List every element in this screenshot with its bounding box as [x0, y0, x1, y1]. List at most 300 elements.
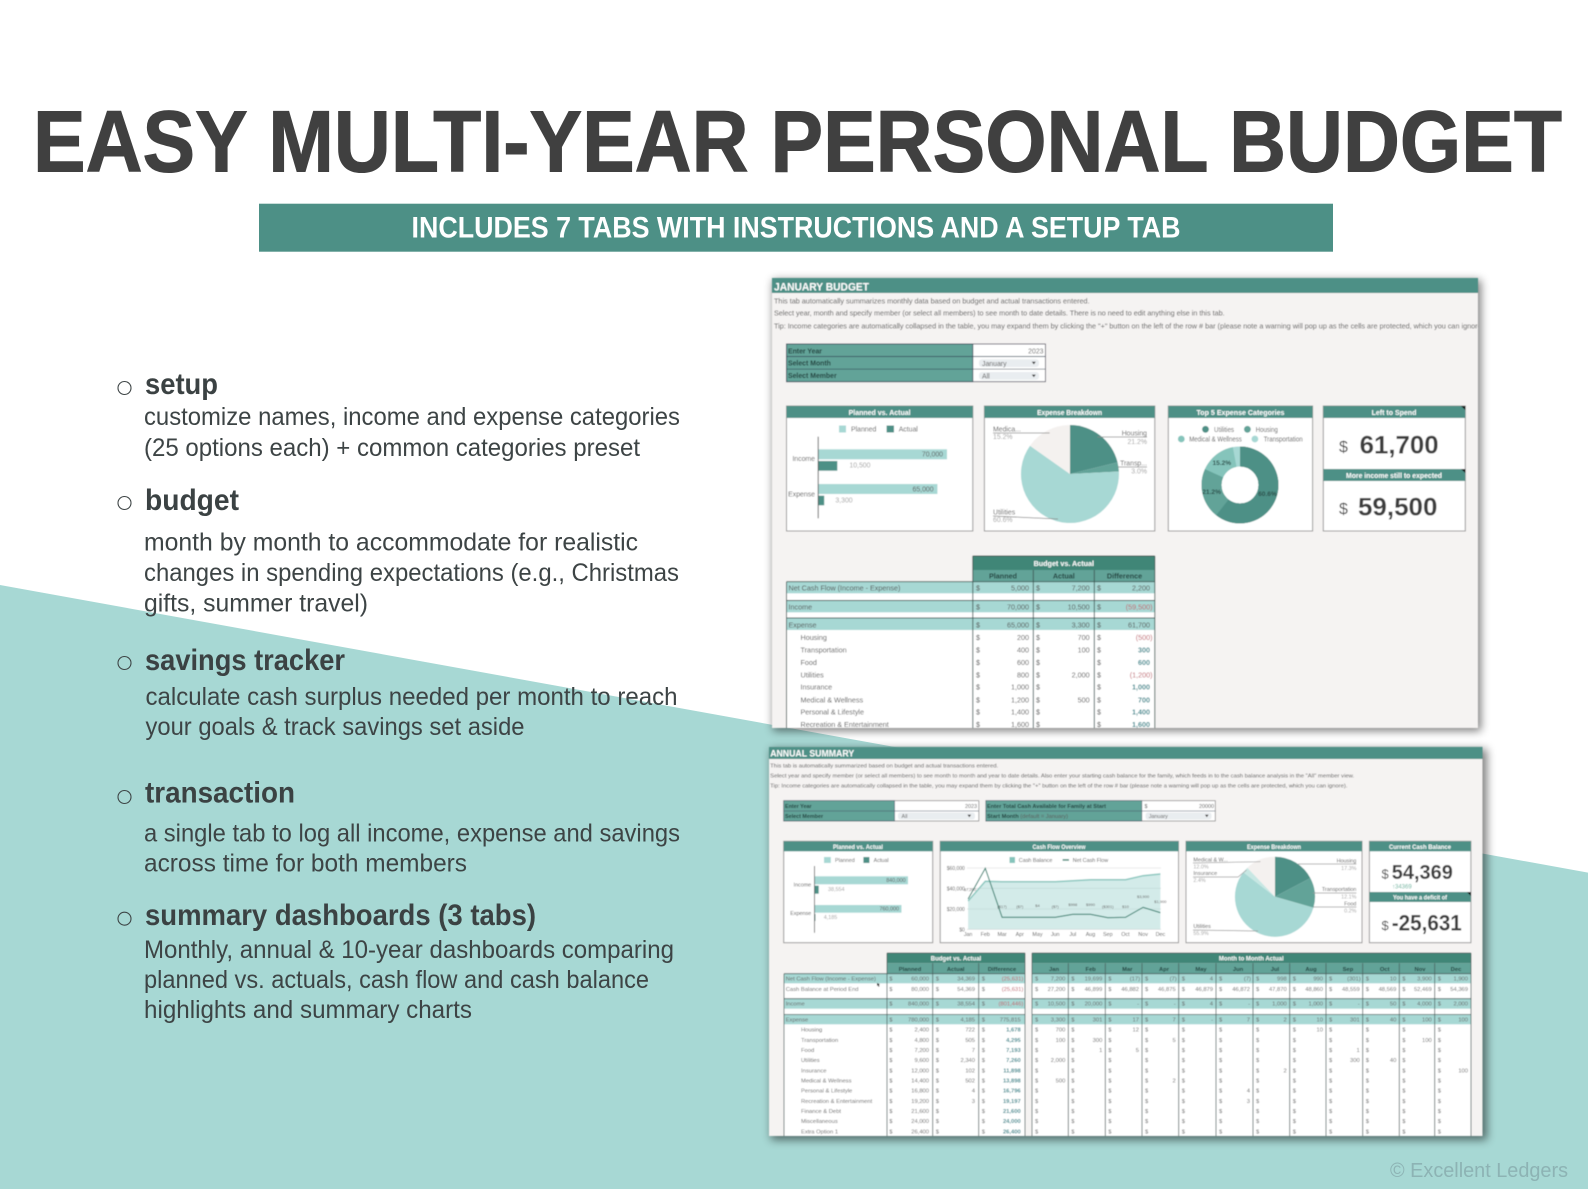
feature: savings tracker: your goals & track savings set aside [146, 713, 524, 741]
table: budget vs actual annual: Budget vs. Actual [931, 956, 982, 962]
card: cash flow overview line chart: Jul [1069, 932, 1076, 938]
card: planned vs actual: 840,000 [886, 878, 906, 884]
card: expense breakdown pie: 15.2% [993, 434, 1013, 441]
table values: 2,200 [1132, 584, 1150, 593]
month headers: Sep [1343, 967, 1354, 973]
table values: 2 [1283, 1068, 1287, 1074]
table values: 1,600 [1011, 720, 1029, 729]
card: left to spend and more income: More income still to expected [1346, 473, 1442, 480]
dollar signs: $$$$$$$$$$$$$$$ [889, 977, 893, 1135]
row labels: Transportation [800, 646, 847, 654]
table values: 700 [1138, 695, 1150, 704]
table values: 47,870 [1269, 987, 1287, 993]
table values: 3,900 [1417, 977, 1432, 983]
table values: 50 [1390, 1001, 1396, 1007]
card: current cash balance and deficit: $ [1382, 866, 1390, 881]
card: cash flow overview line chart: $20,000 [947, 907, 965, 913]
row labels: Expense [788, 620, 816, 629]
table values: 2,000 [1072, 670, 1090, 679]
input selectors: Enter Year [785, 804, 812, 810]
row labels: Utilities [801, 1058, 820, 1064]
card: current cash balance and deficit: ↑34369 [1392, 884, 1412, 890]
feature: summary dashboards: summary dashboards (3 tabs) [145, 899, 536, 932]
table values: 400 [1017, 646, 1029, 654]
instructions text [770, 763, 1355, 790]
table values: 300 [1138, 646, 1150, 654]
card: cash flow overview line chart: Nov [1138, 932, 1148, 938]
table values: 1,600 [1132, 720, 1150, 729]
row labels: Recreation & Entertainment [800, 720, 889, 729]
card: cash flow overview line chart: $60,000 [947, 866, 965, 872]
card: expense breakdown pie: Medica... [993, 427, 1021, 434]
card: left to spend and more income: 59,500 [1358, 494, 1437, 522]
input selectors: January [1149, 814, 1168, 820]
table values: 19,200 [911, 1099, 929, 1105]
table values: 7,200 [914, 1048, 929, 1054]
table values: 5,000 [1011, 584, 1029, 593]
dollar signs: $$$$$$$$$$$$$$$ [1182, 977, 1186, 1135]
panel heading [772, 278, 1478, 294]
card: left to spend and more income: $ [1339, 439, 1348, 456]
card: cash flow overview line chart: $0 [959, 927, 965, 933]
card: expense breakdown pie: Utilities [1193, 924, 1211, 930]
card: expense breakdown pie: 21.2% [1127, 439, 1147, 446]
card: planned vs actual: 70,000 [922, 452, 943, 459]
table values: 21,600 [1003, 1109, 1021, 1115]
table values: 7 [1172, 1018, 1176, 1024]
table values: - [1211, 1018, 1213, 1024]
card: expense breakdown pie [1186, 841, 1362, 943]
table values: 4 [1210, 1001, 1214, 1007]
dollar signs: $$$$$$$$$$$$$$$ [1035, 977, 1039, 1135]
card: left to spend and more income: Left to Spend [1372, 410, 1416, 417]
table values: - [1358, 1001, 1360, 1007]
table values: 10 [1390, 977, 1396, 983]
table values: 48,559 [1342, 987, 1360, 993]
dollar signs: $$$$$$$$$$$$$$$ [1256, 977, 1260, 1135]
month headers [1049, 967, 1462, 973]
table values: 722 [965, 1028, 975, 1034]
month headers: May [1195, 967, 1207, 973]
card: planned vs actual: Income [794, 883, 811, 889]
card: cash flow overview line chart: $998 [1068, 902, 1078, 907]
table values: 2 [1283, 1018, 1287, 1024]
table values: (25,631) [1002, 987, 1023, 993]
table values: (7) [1170, 977, 1177, 983]
feature: setup: setup [145, 368, 218, 401]
row labels [788, 584, 900, 729]
feature: transaction: transaction [145, 777, 295, 810]
month headers: Apr [1159, 967, 1170, 973]
input selectors: 2023 [1028, 348, 1044, 355]
table values: (1,200) [1130, 670, 1152, 679]
card: current cash balance and deficit: 54,369 [1392, 862, 1453, 884]
card: cash flow overview line chart: $3,900 [1137, 894, 1150, 899]
feature: summary dashboards: highlights and summary charts [144, 996, 472, 1024]
icon: cursor [877, 983, 880, 987]
feature: transaction [118, 777, 680, 878]
table values: 102 [965, 1068, 975, 1074]
month headers: Jul [1271, 967, 1280, 973]
feature: setup: (25 options each) + common categories preset [144, 434, 640, 462]
table values: 5 [1172, 1038, 1176, 1044]
table values: 52,469 [1414, 987, 1432, 993]
table values: 61,700 [1128, 620, 1150, 629]
table values: 700 [1056, 1028, 1065, 1034]
card: top 5 expense donut [1168, 406, 1313, 531]
dollar signs [889, 977, 986, 1135]
table values: 1 [1356, 1048, 1360, 1054]
feature: transaction: across time for both members [144, 850, 467, 878]
table values: 1,400 [1132, 708, 1150, 717]
card: expense breakdown pie: 60.6% [993, 517, 1013, 524]
month headers: Oct [1380, 967, 1390, 973]
table values: 7,193 [1006, 1048, 1021, 1054]
table values: 7 [1247, 1018, 1250, 1024]
input selectors: Select Member [788, 373, 837, 380]
table values: (25,631) [1002, 977, 1023, 983]
card: expense breakdown pie: Utilities [993, 509, 1016, 516]
dollar signs: $$$$$$$$$$$$$$$ [1366, 977, 1370, 1135]
row labels: Medical & Wellness [800, 695, 863, 704]
table values: 14,400 [911, 1078, 929, 1084]
table values: - [1248, 1001, 1250, 1007]
table values: 54,369 [957, 987, 975, 993]
table values: 70,000 [1007, 602, 1029, 611]
row labels: Utilities [800, 670, 824, 679]
table: budget vs actual annual: Actual [947, 967, 965, 973]
row labels: Miscellaneous [801, 1119, 838, 1125]
dollar signs: $$$$$$$$$$$$$$$ [1293, 977, 1297, 1135]
feature list [118, 368, 680, 1024]
instructions text: This tab automatically summarizes monthly data based on budget and actual transactions entered. [774, 296, 1090, 305]
row labels: Transportation [801, 1038, 838, 1044]
row labels: Housing [800, 633, 827, 642]
feature: budget: gifts, summer travel) [144, 590, 368, 618]
table values: 3 [1247, 1099, 1250, 1105]
month headers: Feb [1086, 967, 1096, 973]
card: planned vs actual: Planned vs. Actual [833, 845, 883, 851]
input selectors: $ [1144, 804, 1148, 810]
table values: 80,000 [911, 987, 929, 993]
table values: 100 [1422, 1018, 1432, 1024]
card: planned vs actual: 3,300 [835, 497, 853, 504]
row labels: Net Cash Flow (Income - Expense) [786, 977, 876, 983]
table: budget vs actual [786, 556, 1155, 732]
table values: 9,600 [914, 1058, 929, 1064]
table values: 1,000 [1132, 683, 1150, 692]
table values: 4,800 [914, 1038, 929, 1044]
table values: 1,000 [1011, 683, 1029, 692]
table values: 24,000 [911, 1119, 929, 1125]
card: planned vs actual: Planned [835, 858, 855, 864]
input selectors: Select Member [785, 814, 824, 820]
card: cash flow overview line chart: ($7) [1016, 904, 1024, 909]
card: left to spend and more income [1323, 406, 1465, 531]
table values: 500 [1056, 1078, 1065, 1084]
table values: 100 [1078, 646, 1090, 654]
input selectors: 20000 [1199, 804, 1214, 810]
row labels: Insurance [800, 683, 832, 692]
table values: - [1174, 1001, 1176, 1007]
panel heading: ANNUAL SUMMARY [770, 749, 854, 759]
table values: 301 [1350, 1018, 1360, 1024]
table values: 46,899 [1085, 987, 1102, 993]
table values: 12 [1133, 1028, 1139, 1034]
table values: 17 [1133, 1018, 1139, 1024]
card: cash flow overview line chart: Jun [1051, 932, 1060, 938]
card: planned vs actual: Actual [899, 426, 918, 434]
instructions text: This tab is automatically summarized based on budget and actual transactions entered. [770, 763, 999, 769]
feature: savings tracker: calculate cash surplus needed per month to reach [146, 683, 678, 711]
table values [1048, 977, 1468, 1105]
shadow of january panel [773, 280, 1481, 731]
table values: 54,369 [1450, 987, 1468, 993]
month headers: Aug [1305, 967, 1317, 973]
dollar signs: $$$$$$$$$$$$$$$ [982, 977, 986, 1135]
table values: - [1137, 1001, 1139, 1007]
dollar signs: $$$$$$$$$$$$$$$ [1145, 977, 1149, 1135]
dollar signs: $$$$$$$$$$$$$$$ [936, 977, 940, 1135]
feature: budget: changes in spending expectations (e.g., Christmas [144, 559, 679, 587]
table values: 505 [965, 1038, 975, 1044]
panel heading: JANUARY BUDGET [774, 282, 869, 294]
input selectors: All [902, 814, 908, 820]
table: budget vs actual annual [784, 953, 1025, 1140]
instructions text: Select year and specify member (or select all members) to see month to month and year to date details. Also enter your starting cash balance for the family, which feeds in to the cash balance analysis in the "All" member view. [770, 773, 1355, 779]
input selectors: January [982, 361, 1007, 368]
card: expense breakdown pie: 55.9% [1193, 931, 1209, 937]
table values: 7,200 [1051, 977, 1065, 983]
panel: January budget screenshot [772, 278, 1486, 732]
table values: 60,000 [911, 977, 929, 983]
table values: 7 [972, 1048, 975, 1054]
card: planned vs actual: Income [792, 456, 815, 463]
table values: 1,678 [1006, 1028, 1021, 1034]
feature: budget: month by month to accommodate for realistic [144, 529, 638, 557]
card: top 5 expense donut: Top 5 Expense Categories [1196, 410, 1285, 417]
card: top 5 expense donut: 21.2% [1202, 489, 1221, 496]
watermark: © Excellent Ledgers [1390, 1160, 1568, 1182]
table values: 13,898 [1003, 1078, 1021, 1084]
dollar signs: $$$$$$$$$$$$$$$ [1071, 977, 1075, 1135]
input selectors [784, 801, 1215, 821]
card: cash flow overview line chart: Cash Balance [1019, 858, 1052, 864]
table values: 48,860 [1305, 987, 1323, 993]
card: planned vs actual: 38,554 [828, 887, 844, 893]
card: cash flow overview line chart: $10 [1122, 904, 1130, 909]
card: cash flow overview line chart: Apr [1016, 932, 1024, 938]
card: planned vs actual: 65,000 [913, 486, 934, 493]
table values: 34,369 [957, 977, 975, 983]
table values: 10 [1317, 1028, 1323, 1034]
card: expense breakdown pie: Expense Breakdown [1247, 845, 1301, 851]
card: cash flow overview line chart: Net Cash Flow [1073, 858, 1108, 864]
card: expense breakdown pie: 12.1% [1341, 894, 1357, 900]
dollar signs: $$$$$$$$$$$ [976, 584, 980, 729]
table values: 2,400 [914, 1028, 929, 1034]
row labels: Expense [786, 1018, 808, 1024]
table values: 600 [1017, 658, 1029, 667]
table values: 2,000 [1453, 1001, 1468, 1007]
table values: 4 [972, 1089, 976, 1095]
table values: (7) [1244, 977, 1251, 983]
table values: 19,699 [1085, 977, 1102, 983]
table values: 840,000 [908, 1001, 929, 1007]
row labels: Personal & Lifestyle [800, 708, 864, 717]
table values: 600 [1138, 658, 1150, 667]
table values: 1,200 [1011, 695, 1029, 704]
row labels: Personal & Lifestyle [801, 1089, 852, 1095]
input selectors: All [982, 373, 990, 380]
table values: 100 [1056, 1038, 1065, 1044]
instructions text [774, 296, 1486, 330]
table values: 3,300 [1072, 620, 1090, 629]
table values: 100 [1422, 1038, 1432, 1044]
card: expense breakdown pie: 17.3% [1341, 866, 1357, 872]
card: expense breakdown pie: Insurance [1193, 871, 1217, 877]
instructions text: Select year, month and specify member (or select all members) to see month to date details. There is no need to edit anything else in this tab. [774, 309, 1225, 318]
feature: summary dashboards: Monthly, annual & 10-year dashboards comparing [144, 936, 674, 964]
card: current cash balance and deficit [1369, 841, 1471, 943]
card: planned vs actual: Planned vs. Actual [849, 410, 911, 417]
card: cash flow overview line chart: $7,200 [964, 887, 977, 892]
dollar signs [976, 584, 1101, 729]
feature: savings tracker: savings tracker [145, 644, 345, 677]
table values: 46,875 [1158, 987, 1176, 993]
card: cash flow overview line chart: $40,000 [947, 886, 965, 892]
background teal diagonal shape [0, 585, 1588, 1189]
card: current cash balance and deficit: -25,631 [1392, 911, 1462, 936]
table values: 24,000 [1003, 1119, 1021, 1125]
month headers: Nov [1415, 967, 1426, 973]
card: left to spend and more income: 61,700 [1360, 431, 1439, 459]
table values: 300 [1350, 1058, 1360, 1064]
dollar signs: $$$$$$$$$$$$$$$ [1402, 977, 1406, 1135]
card: expense breakdown pie: 0.2% [1344, 909, 1357, 915]
table values: 500 [1078, 695, 1090, 704]
card: cash flow overview line chart [940, 841, 1178, 943]
card: expense breakdown pie [984, 406, 1155, 531]
table values: 3,300 [1051, 1018, 1065, 1024]
table: budget vs actual: Planned [989, 572, 1017, 580]
card: planned vs actual [784, 841, 933, 943]
table values: 10,500 [1048, 1001, 1065, 1007]
card: planned vs actual: Expense [788, 492, 815, 499]
table values: 200 [1017, 633, 1029, 642]
table values: (17) [1130, 977, 1140, 983]
table: month to month actual [1032, 953, 1471, 1140]
table values: 2,000 [1051, 1058, 1065, 1064]
card: cash flow overview line chart: $4 [1035, 903, 1040, 908]
dollar signs: $$$$$$$$$$$$$$$ [1219, 977, 1223, 1135]
card: cash flow overview line chart: ($301) [1102, 904, 1114, 909]
table: budget vs actual: Difference [1107, 572, 1142, 580]
card: cash flow overview line chart: Oct [1121, 932, 1130, 938]
card: planned vs actual: 10,500 [849, 463, 871, 470]
card: planned vs actual [786, 406, 973, 531]
card: cash flow overview line chart: Aug [1086, 932, 1095, 938]
row labels: Finance & Debt [801, 1109, 841, 1115]
input selectors: 2023 [965, 804, 977, 810]
table values: 16,796 [1003, 1089, 1021, 1095]
table values [908, 977, 1023, 1135]
table values: (59,500) [1126, 602, 1152, 611]
feature: budget [118, 484, 679, 618]
input selectors: Select Month [788, 361, 831, 368]
table values: 780,000 [908, 1018, 929, 1024]
card: cash flow overview line chart: $1,900 [1154, 899, 1167, 904]
table values: 100 [1458, 1018, 1468, 1024]
table values: 7,200 [1072, 584, 1090, 593]
card: planned vs actual: 4,185 [824, 915, 837, 921]
table values: (301) [1347, 977, 1361, 983]
table values: 16,800 [911, 1089, 929, 1095]
card: current cash balance and deficit: $ [1382, 918, 1390, 933]
card: cash flow overview line chart: Mar [997, 932, 1007, 938]
table values: 10 [1317, 1018, 1323, 1024]
table values: 990 [1313, 977, 1323, 983]
table values: 4,000 [1417, 1001, 1432, 1007]
table values: 11,898 [1003, 1068, 1021, 1074]
card: cash flow overview line chart: $990 [1086, 902, 1096, 907]
table values: 19,197 [1003, 1099, 1021, 1105]
card: cash flow overview line chart: Cash Flow Overview [1032, 845, 1086, 851]
feature: summary dashboards [118, 899, 674, 1024]
card: cash flow overview line chart: ($17) [997, 904, 1007, 909]
table values: 48,569 [1379, 987, 1396, 993]
dollar signs: $$$$$$$$$$$ [1036, 584, 1040, 729]
card: expense breakdown pie: Food [1344, 901, 1356, 907]
row labels: Food [800, 658, 817, 667]
card: expense breakdown pie: 2.4% [1193, 878, 1206, 884]
row labels: Insurance [801, 1068, 826, 1074]
instructions text: Tip: Income categories are automatically collapsed in the table, you may expand them by clicking the "+" button on the left of the row # bar (please note a warning will pop up as the cells are protected, which you can ignore). [770, 784, 1348, 790]
table values: 301 [1093, 1018, 1102, 1024]
table values: 46,872 [1232, 987, 1250, 993]
table values: 26,400 [1003, 1129, 1021, 1135]
table values: 4,185 [960, 1018, 975, 1024]
card: current cash balance and deficit: You have a deficit of [1393, 896, 1448, 902]
table values: 502 [965, 1078, 975, 1084]
row labels: Extra Option 1 [801, 1129, 838, 1135]
table values: 100 [1458, 1068, 1468, 1074]
feature: transaction: a single tab to log all income, expense and savings [144, 820, 680, 848]
table values: 800 [1017, 670, 1029, 679]
table values: 2,340 [960, 1058, 975, 1064]
instructions text: Tip: Income categories are automatically collapsed in the table, you may expand them by clicking the "+" button on the left of the row # bar (please note a warning will pop up as the cells are protected, which you can ignore). [774, 321, 1486, 330]
dollar signs: $$$$$$$$$$$$$$$ [1329, 977, 1333, 1135]
table values: (801,446) [998, 1001, 1023, 1007]
table values: 775,815 [1000, 1018, 1021, 1024]
table values: 700 [1078, 633, 1090, 642]
table values: 4 [1247, 1089, 1251, 1095]
subtitle banner: INCLUDES 7 TABS WITH INSTRUCTIONS AND A SETUP TAB [412, 212, 1180, 245]
card: expense breakdown pie: Housing [1122, 431, 1147, 438]
table: month to month actual: Month to Month Actual [1219, 956, 1284, 962]
input selectors [786, 344, 1045, 382]
table values: 4,295 [1006, 1038, 1021, 1044]
card: expense breakdown pie: 12.0% [1193, 865, 1209, 871]
input selectors: Enter Year [788, 348, 822, 355]
row labels: Housing [801, 1028, 822, 1034]
card: cash flow overview line chart: May [1032, 932, 1043, 938]
dollar signs [1035, 977, 1442, 1135]
feature: summary dashboards: planned vs. actuals, cash flow and cash balance [144, 966, 649, 994]
card: top 5 expense donut: 15.2% [1212, 460, 1231, 467]
feature: budget: budget [145, 484, 239, 517]
table values: 40 [1390, 1058, 1396, 1064]
